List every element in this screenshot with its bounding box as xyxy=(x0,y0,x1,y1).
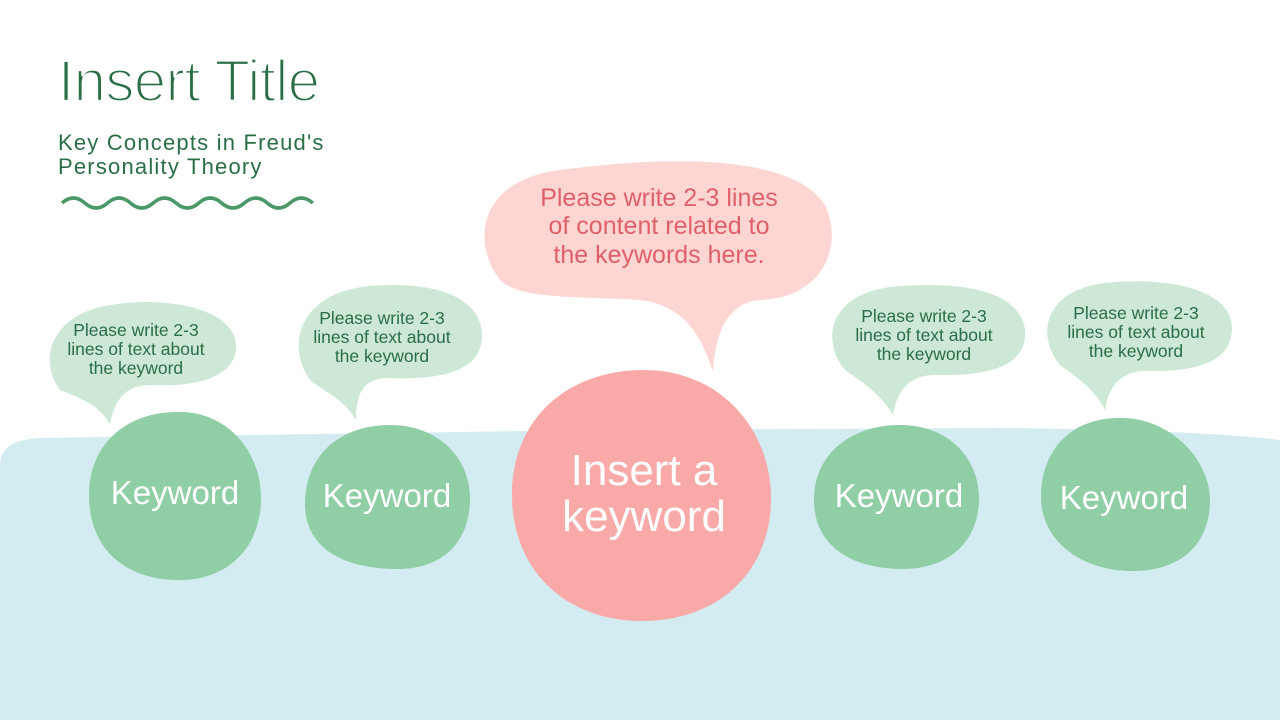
callout 5 xyxy=(1047,281,1232,410)
background water band xyxy=(0,428,1280,720)
callout 1: the keyword xyxy=(89,358,183,378)
callout 4: the keyword xyxy=(877,344,971,364)
callout 2: lines of text about xyxy=(313,327,451,347)
callout 2 xyxy=(299,285,482,420)
callout 1: Please write 2-3 xyxy=(73,320,199,340)
callout 4: Please write 2-3 xyxy=(861,306,987,326)
keyword circle center: Insert a xyxy=(571,446,718,495)
subtitle xyxy=(58,130,325,179)
keyword circle 2: Keyword xyxy=(323,477,451,514)
callout center: Please write 2-3 lines xyxy=(540,184,778,212)
keyword circle 4: Keyword xyxy=(835,477,963,514)
callout center: the keywords here. xyxy=(553,241,765,269)
subtitle: Personality Theory xyxy=(58,154,263,179)
keyword circle 5: Keyword xyxy=(1060,479,1188,516)
callout 5: the keyword xyxy=(1089,341,1183,361)
callout 5: Please write 2-3 xyxy=(1073,303,1199,323)
keyword circle center: keyword xyxy=(562,492,726,541)
keyword circle 1: Keyword xyxy=(111,474,239,511)
callout 1: lines of text about xyxy=(67,339,205,359)
callout 1 xyxy=(50,302,236,425)
keyword circle 5 xyxy=(1041,418,1210,571)
keyword circle 4 xyxy=(814,425,979,569)
keyword circle 2 xyxy=(305,425,470,569)
wavy underline xyxy=(62,198,313,208)
keyword circle center xyxy=(512,370,771,621)
callout 2: Please write 2-3 xyxy=(319,308,445,328)
subtitle: Key Concepts in Freud's xyxy=(58,130,325,155)
callout center: of content related to xyxy=(549,212,769,240)
title: Insert Title xyxy=(58,49,320,114)
callout 5: lines of text about xyxy=(1067,322,1205,342)
callout 2: the keyword xyxy=(335,346,429,366)
callout 4: lines of text about xyxy=(855,325,993,345)
callout 4 xyxy=(832,285,1025,415)
callout center xyxy=(484,161,832,372)
keyword circle 1 xyxy=(89,412,261,580)
